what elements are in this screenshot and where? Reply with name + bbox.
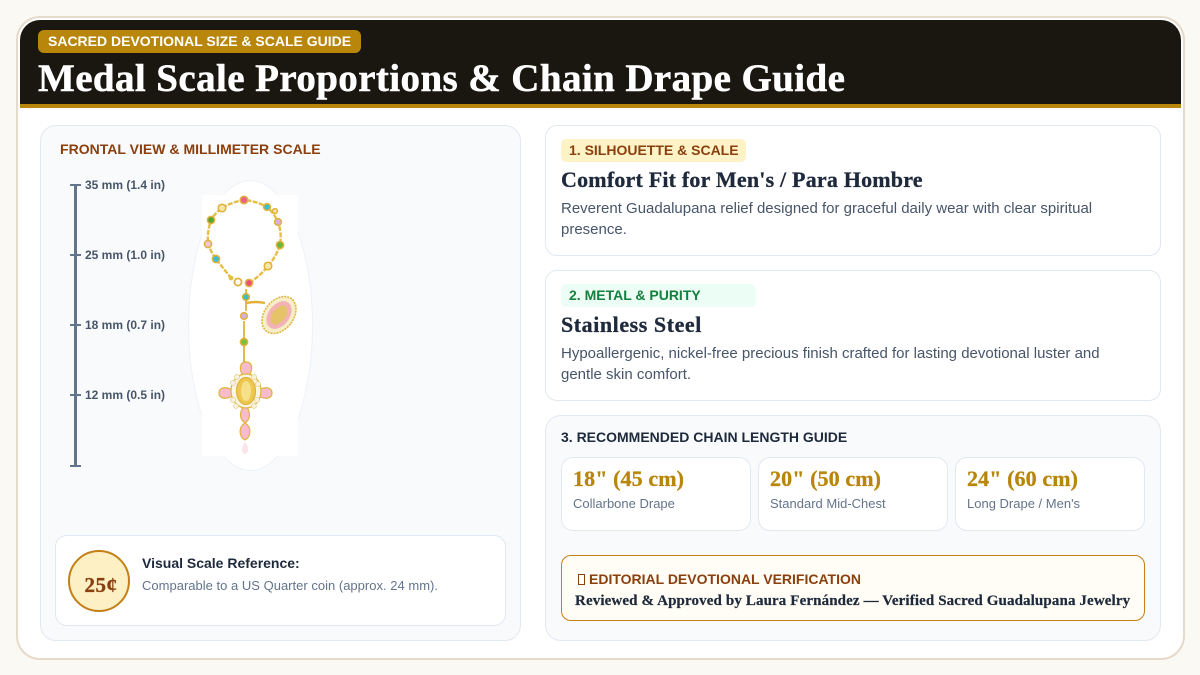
- callout heading: EDITORIAL DEVOTIONAL VERIFICATION: [589, 571, 861, 587]
- badge: SACRED DEVOTIONAL SIZE & SCALE GUIDE: [48, 33, 351, 49]
- description: presence.: [561, 221, 627, 238]
- millimeter ruler: [70, 178, 165, 467]
- option: 20 inch: [758, 457, 948, 531]
- tick: 18 mm: 18 mm (0.7 in): [85, 318, 165, 332]
- silhouette backing: [188, 180, 313, 471]
- chain loop: [208, 200, 281, 283]
- panel: chain length guide: [545, 415, 1161, 641]
- panel: frontal view and scale: [40, 125, 521, 641]
- coin reference title: Visual Scale Reference:: [142, 555, 300, 571]
- callout text: Reviewed & Approved by Laura Fernández — Verified Sacred Guadalupana Jewelry: [575, 593, 1130, 609]
- medal product image: [202, 195, 298, 456]
- option: 18 inch: 18" (45 cm): [573, 466, 684, 491]
- description: gentle skin comfort.: [561, 366, 691, 383]
- option: 20 inch: Standard Mid-Chest: [770, 496, 886, 511]
- description: [561, 345, 1100, 383]
- option: 18 inch: Collarbone Drape: [573, 496, 675, 511]
- tag: [561, 139, 746, 162]
- option: 24 inch: [955, 457, 1145, 531]
- header band: [20, 20, 1181, 108]
- panel heading: FRONTAL VIEW & MILLIMETER SCALE: [60, 141, 321, 157]
- quarter coin icon: [68, 550, 130, 612]
- tick: 35 mm: 35 mm (1.4 in): [85, 178, 165, 192]
- tick: 12 mm: 12 mm (0.5 in): [85, 388, 165, 402]
- title: Medal Scale Proportions & Chain Drape Guide: [38, 57, 845, 100]
- coin reference description: Comparable to a US Quarter coin (approx. 24 mm).: [142, 578, 438, 593]
- cross: [219, 362, 272, 440]
- coin reference card: [55, 535, 506, 626]
- description: Reverent Guadalupana relief designed for graceful daily wear with clear spiritual: [561, 200, 1092, 217]
- quarter coin icon: 25¢: [84, 573, 118, 597]
- option: 18 inch: [561, 457, 751, 531]
- tag: [561, 284, 756, 307]
- option: 24 inch: Long Drape / Men's: [967, 496, 1080, 511]
- option: 20 inch: 20" (50 cm): [770, 466, 881, 491]
- description: Hypoallergenic, nickel-free precious finish crafted for lasting devotional luster and: [561, 345, 1100, 362]
- oval medal: [255, 290, 303, 340]
- cross pearls: [230, 374, 261, 408]
- heading: Comfort Fit for Men's / Para Hombre: [561, 167, 923, 192]
- option: 24 inch: 24" (60 cm): [967, 466, 1078, 491]
- heading: Stainless Steel: [561, 312, 702, 337]
- tag: 1. SILHOUETTE & SCALE: [569, 142, 739, 158]
- tag: 2. METAL & PURITY: [569, 287, 701, 303]
- tick: 25 mm: 25 mm (1.0 in): [85, 248, 165, 262]
- ruler end cap: [70, 465, 81, 467]
- badge: [38, 30, 361, 53]
- card: metal and purity: [545, 270, 1161, 401]
- editorial verification callout: [561, 555, 1145, 621]
- panel heading: 3. RECOMMENDED CHAIN LENGTH GUIDE: [561, 429, 847, 445]
- description: [561, 200, 1092, 238]
- missing glyph icon: [578, 574, 585, 585]
- card: silhouette and scale: [545, 125, 1161, 256]
- beads: [204, 196, 284, 346]
